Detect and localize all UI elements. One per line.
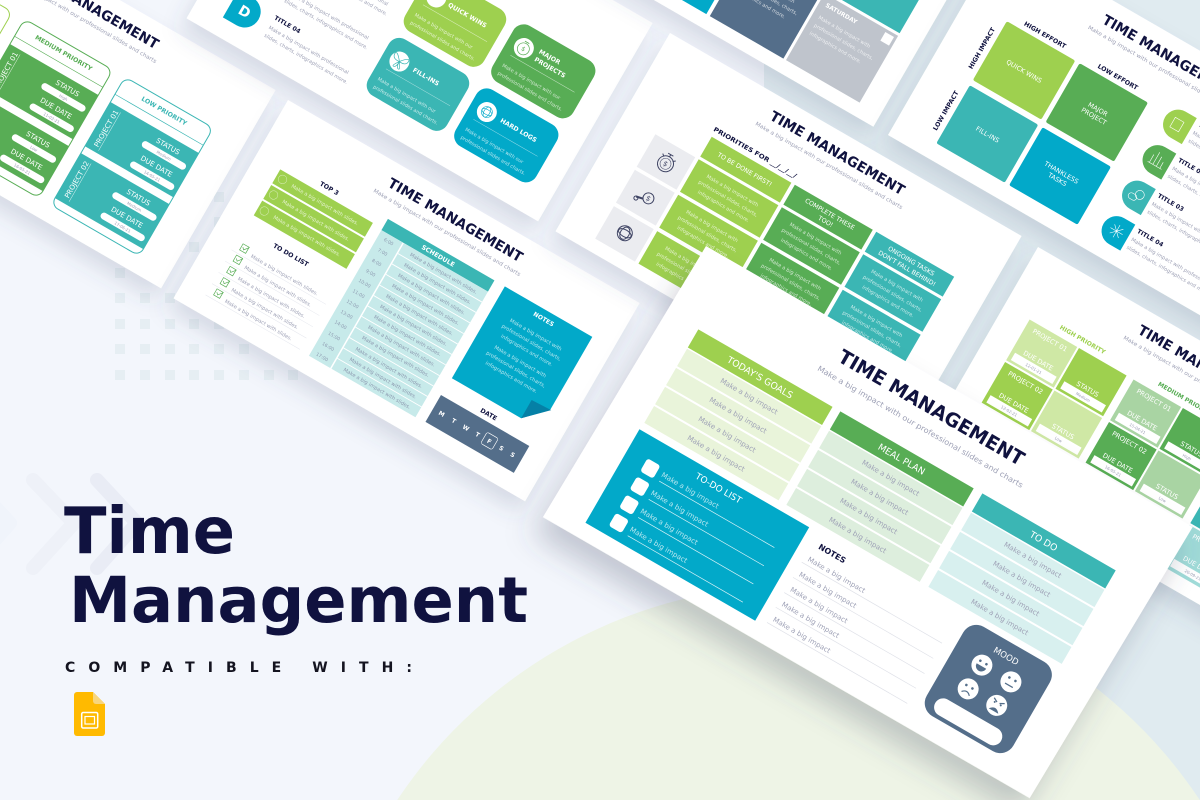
card: major projects: $ <box>520 45 527 53</box>
panel: today's goals: Make a big impact <box>719 376 780 416</box>
card: major projects: PROJECTS <box>533 56 567 80</box>
card: hard logs <box>450 84 563 187</box>
column: to be done first: professional slides, charts, <box>697 180 759 219</box>
panel: today's goals: Make a big impact <box>708 395 769 436</box>
slide: priorities table: PRIORITIES FOR __/__/__/ <box>712 126 798 180</box>
slide: schedule planner <box>174 100 640 501</box>
slide: impact effort matrix: HIGH EFFORT <box>1023 21 1068 51</box>
grid: medium priority: PROJECT 01 <box>1135 387 1173 414</box>
grid: high priority: STATUS <box>1075 380 1100 399</box>
slide: main planner <box>543 246 1193 798</box>
table: schedule: 7:00 <box>376 247 388 258</box>
title: Management <box>69 564 528 637</box>
column: to be done first: Make a big impact with <box>664 246 718 281</box>
panel: to do: Make a big impact <box>1002 540 1063 580</box>
panel: to do list: Make a big impact with slides. <box>243 265 313 309</box>
grid: medium priority: 16-05-21 <box>1104 464 1123 478</box>
grid: medium priority: Low <box>1158 495 1168 504</box>
panel: meal plan <box>786 411 974 582</box>
list: titles with icons: TITLE 03 <box>1156 193 1185 213</box>
grid: high priority: Medium <box>1075 391 1091 403</box>
panel: notes <box>767 539 955 703</box>
column: ongoing tasks: DON'T FALL BEHIND! <box>877 250 937 288</box>
icons column: $ <box>644 194 652 203</box>
panel: date: F <box>485 438 493 446</box>
panel: low priority: 14-05-21 <box>143 169 162 183</box>
card: quick wins: Make a big impact with our <box>413 12 474 51</box>
card: fill-ins: professional slides and charts. <box>372 84 439 127</box>
panel: sticky notes: Make a big impact with <box>493 345 547 379</box>
icon: letter D tab <box>223 0 267 33</box>
table: schedule: 17:00 <box>315 351 329 363</box>
panel: sticky notes: NOTES <box>532 311 555 328</box>
table: schedule: Make a big impact with slides. <box>408 252 478 296</box>
panel: to do: Make a big impact <box>991 559 1052 599</box>
quadrant: major project: PROJECT <box>1080 106 1108 127</box>
table: schedule: Make a big impact with slides. <box>372 314 442 358</box>
panel: meal plan: Make a big impact <box>849 477 910 517</box>
column: to be done first: professional slides, charts, <box>676 215 738 254</box>
column: ongoing tasks: Make a big impact with <box>849 304 903 339</box>
grid: low priority <box>1165 482 1200 595</box>
table: schedule: SCHEDULE <box>420 244 456 269</box>
panel: to-do list: Make a big impact <box>649 488 710 529</box>
panel: to do list: Make a big impact with slides. <box>249 254 319 298</box>
title <box>64 495 528 637</box>
panel: medium priority <box>0 19 113 198</box>
column: complete these too: Make a big impact with <box>768 257 822 292</box>
table: schedule: 12:00 <box>345 299 360 311</box>
slide: priorities table: TIME MANAGEMENT <box>767 109 908 199</box>
panel: to do: Make a big impact <box>969 597 1030 637</box>
grid: medium priority: STATUS <box>1154 482 1180 501</box>
grid: high priority: 12-01-21 <box>1025 362 1043 376</box>
panel: today's goals: TODAY'S GOALS <box>724 354 795 401</box>
title: Make a big impact with our professional slides and charts <box>372 188 521 278</box>
panel: date: S <box>509 451 516 459</box>
table: schedule: Make a big impact with slides. <box>342 367 412 411</box>
panel: notes: Make a big impact <box>780 600 841 640</box>
grid: high priority: PROJECT 02 <box>1007 370 1044 396</box>
panel: top 3 <box>254 160 378 269</box>
text block: title 04: slides, charts, infographics and more. <box>263 33 349 86</box>
slide: priority project lists <box>0 0 276 288</box>
main slide title: TIME MANAGEMENT <box>834 345 1029 471</box>
grid: high priority: PROJECT 01 <box>1031 327 1069 354</box>
column: to be done first: Make a big impact with <box>685 209 739 244</box>
card: hard logs: Make a big impact with our <box>464 127 524 165</box>
panel: saturday: professional slides, charts, <box>813 23 874 62</box>
panel: low priority: PROJECT 02 <box>63 160 91 200</box>
panel: mood <box>919 619 1057 759</box>
table: schedule: 8:00 <box>370 258 382 268</box>
column: ongoing tasks: infographics and more. <box>840 320 895 355</box>
list: titles with icons <box>1096 104 1200 301</box>
panel: to do <box>928 493 1116 664</box>
card: quick wins: professional slides and charts. <box>409 20 476 63</box>
quadrant: thankless tasks: THANKLESS <box>1042 159 1080 186</box>
panel: medium priority: Low <box>29 145 39 153</box>
icon: neutral face <box>997 668 1025 696</box>
panel: to do list <box>206 226 340 349</box>
panel: meal plan: Make a big impact <box>838 496 899 536</box>
column: ongoing tasks: professional slides, charts, <box>841 310 903 349</box>
grid: medium priority: 15-04-21 <box>1128 422 1147 436</box>
grid: medium priority <box>1086 369 1200 519</box>
table: schedule: 15:00 <box>327 331 341 343</box>
panel: low priority: DUE DATE <box>110 205 144 230</box>
panel: notes: NOTES <box>817 542 848 565</box>
column: complete these too: professional slides, charts, <box>780 228 842 267</box>
icons column: $ <box>661 160 669 169</box>
quadrant: thankless tasks <box>1009 127 1111 225</box>
grid: medium priority: PROJECT 02 <box>1110 430 1148 456</box>
panel: to do list: Make a big impact with slides. <box>230 288 300 331</box>
slide: priorities table: Make a big impact with our professional slides and charts <box>754 121 903 211</box>
subtitle: compatible with: COMPATIBLE WITH: <box>65 660 412 676</box>
quadrant: quick wins: QUICK WINS <box>1005 58 1043 85</box>
column: to be done first <box>638 137 791 310</box>
panel: date: T <box>450 417 458 426</box>
panel: low priority <box>51 77 213 256</box>
panel: friday <box>710 0 822 59</box>
panel: low priority: STATUS <box>154 137 182 157</box>
icon: happy face <box>968 651 996 679</box>
panel: notes: Make a big impact <box>806 555 867 595</box>
card: major projects: Make a big impact with our <box>501 63 561 101</box>
text block: title 04 <box>263 15 359 86</box>
panel: low priority: STATUS <box>125 188 152 208</box>
panel: date: DATE <box>479 407 498 422</box>
quadrant: quick wins <box>973 21 1075 120</box>
title: TIME MANAGEMENT <box>385 176 526 266</box>
column: to be done first: infographics and more. <box>655 261 709 296</box>
panel: date: W <box>461 424 471 433</box>
panel: top 3: Make a big impact with slides. <box>272 215 342 259</box>
panel: meal plan: MEAL PLAN <box>876 442 927 478</box>
table: schedule: Make a big impact with slides. <box>354 347 424 390</box>
slide: impact effort matrix: LOW IMPACT <box>932 89 961 132</box>
grid: medium priority: High <box>1182 453 1193 462</box>
card: major projects <box>487 20 600 123</box>
panel: to do list: TO DO LIST <box>272 243 310 269</box>
table: schedule: 14:00 <box>333 319 348 331</box>
card: quick wins: QUICK WINS <box>447 2 488 30</box>
icon: google slides <box>74 692 105 736</box>
table: schedule: 16:00 <box>321 341 335 353</box>
panel: low priority: 17-06-21 <box>113 220 132 234</box>
column: to be done first: infographics and more. <box>676 225 730 260</box>
quadrant: major project <box>1046 63 1148 162</box>
quadrant: thankless tasks: TASKS <box>1046 171 1068 188</box>
panel: to-do list: Make a big impact <box>660 470 721 511</box>
panel: medium priority: 11-02-21 <box>43 111 61 125</box>
grid: high priority <box>982 309 1133 459</box>
quadrant: major project: MAJOR <box>1087 101 1110 119</box>
icon: letter D tab: D <box>235 3 253 22</box>
grid: medium priority: DUE DATE <box>1126 409 1158 433</box>
panel: to-do list: Make a big impact <box>628 525 689 565</box>
panel: low priority: DUE DATE <box>139 154 174 179</box>
icon: sad face <box>954 675 982 703</box>
table: schedule: Make a big impact with slides. <box>378 304 448 348</box>
card: fill-ins: Make a big impact with our <box>376 76 437 115</box>
panel: to do list: Make a big impact with slides. <box>223 299 293 343</box>
panel: today's goals: Make a big impact <box>697 414 758 455</box>
icons column <box>595 134 695 262</box>
table: schedule: Make a big impact with slides. <box>402 263 472 306</box>
panel: medium priority: DUE DATE <box>39 96 73 121</box>
column: to be done first: infographics and more. <box>696 190 750 224</box>
table: schedule: Make a big impact with slides. <box>348 357 418 401</box>
card: quick wins <box>399 0 511 71</box>
panel: notes: Make a big impact <box>771 615 832 655</box>
column: complete these too: infographics and more. <box>759 273 813 308</box>
panel: notes: Make a big impact <box>797 570 858 610</box>
table: schedule <box>309 219 494 417</box>
table: schedule: 11:00 <box>351 288 366 300</box>
grid: high priority: HIGH PRIORITY <box>1058 324 1107 356</box>
panel: medium priority: DUE DATE <box>9 147 44 172</box>
panel: sticky notes: professional slides, charts, <box>500 324 562 363</box>
quadrant: fill-ins: FILL-INS <box>974 125 1001 145</box>
main slide title: Make a big impact with our professional slides and charts <box>816 364 1025 490</box>
table: schedule: Make a big impact with slides. <box>384 294 454 337</box>
panel: sticky notes <box>452 286 593 429</box>
panel: medium priority: STATUS <box>24 130 52 150</box>
column: complete these too: TOO! <box>816 214 834 229</box>
panel: medium priority: MEDIUM PRIORITY <box>34 34 94 73</box>
panel: to do: Make a big impact <box>980 578 1041 618</box>
card: hard logs: HARD LOGS <box>499 117 538 144</box>
table: schedule: Make a big impact with slides. <box>396 273 466 317</box>
panel: today's goals: Make a big impact <box>686 433 747 474</box>
panel: medium priority: 16-05-21 <box>13 162 32 176</box>
panel: sticky notes: Make a big impact with <box>508 318 563 353</box>
panel: meal plan: Make a big impact <box>860 458 921 498</box>
text block: title 04: Make a big impact with professional <box>267 25 350 76</box>
panel: to do: TO DO <box>1027 529 1059 554</box>
panel: low priority: LOW PRIORITY <box>140 96 188 128</box>
table: schedule: Make a big impact with slides. <box>366 325 436 369</box>
slide: impact effort matrix: HIGH IMPACT <box>968 26 997 71</box>
panel: sticky notes: infographics and more. <box>484 360 538 395</box>
panel: sticky notes: professional slides, charts, <box>485 350 547 390</box>
panel: saturday: infographics and more. <box>808 31 862 65</box>
panel: low priority: Medium <box>156 149 172 162</box>
panel: sticky notes: infographics and more. <box>500 334 554 368</box>
column: complete these too: professional slides, charts, <box>760 263 821 302</box>
panel: to do list: Make a big impact with slides. <box>236 276 306 320</box>
card: hard logs: professional slides and charts. <box>459 135 527 177</box>
panel: to-do list: Make a big impact <box>639 507 700 547</box>
column: ongoing tasks <box>824 232 954 368</box>
column: ongoing tasks: ONGOING TASKS <box>886 245 936 278</box>
card: major projects: MAJOR <box>537 49 561 67</box>
grid: high priority: DUE DATE <box>1022 349 1055 373</box>
column: to be done first: professional slides, charts, <box>655 251 717 291</box>
title: Time <box>64 495 235 569</box>
table: schedule: 6:00 <box>382 237 394 247</box>
column: ongoing tasks: infographics and more. <box>861 285 915 319</box>
panel: meal plan: Make a big impact <box>827 515 888 555</box>
slide: priorities table <box>556 33 1022 434</box>
panel: to-do list: TO-DO LIST <box>692 471 743 507</box>
column: ongoing tasks: professional slides, charts, <box>861 275 923 314</box>
table: schedule: 9:00 <box>364 268 376 279</box>
slide: priority status grid <box>924 247 1200 648</box>
grid: high priority: STATUS <box>1050 422 1076 441</box>
grid: medium priority: DUE DATE <box>1101 451 1134 475</box>
card: fill-ins <box>362 34 474 135</box>
column: complete these too: infographics and more. <box>779 238 834 272</box>
panel: date: M <box>437 410 446 419</box>
panel: top 3: Make a big impact with slides. <box>281 199 351 243</box>
text block: title 04: TITLE 04 <box>273 15 302 35</box>
slide: weekly calendar <box>522 0 988 127</box>
table: schedule: Make a big impact with slides. <box>390 283 460 327</box>
panel: notes: Make a big impact <box>789 585 850 625</box>
slide: quadrant cards <box>186 0 653 221</box>
panel: medium priority: STATUS <box>54 79 81 99</box>
slide: impact effort matrix: LOW EFFORT <box>1096 63 1139 92</box>
card: fill-ins: FILL-INS <box>411 67 441 88</box>
panel: low priority: Medium <box>126 201 143 213</box>
panel: saturday: SATURDAY <box>824 2 859 26</box>
list: titles with icons: TITLE 04 <box>1136 228 1164 249</box>
main slide content <box>585 277 1146 764</box>
panel: medium priority: High <box>58 93 69 102</box>
card: major projects: professional slides and charts. <box>496 71 564 113</box>
column: to be done first: TO BE DONE FIRST! <box>715 151 773 189</box>
column: complete these too: Make a big impact with <box>788 222 842 257</box>
icon: angry face <box>982 691 1011 720</box>
panel: date: T <box>474 431 482 440</box>
slide: impact effort matrix <box>888 0 1200 338</box>
table: schedule: 13:00 <box>339 309 354 321</box>
panel: date: S <box>498 445 505 453</box>
column: ongoing tasks: Make a big impact with <box>870 269 924 304</box>
panel: top 3: Make a big impact with slides. <box>290 184 360 227</box>
panel: to-do list <box>585 429 809 621</box>
grid: high priority: DUE DATE <box>997 391 1030 415</box>
panel: saturday <box>786 0 898 103</box>
grid: high priority: Low <box>1054 435 1064 444</box>
panel: low priority: PROJECT 01 <box>93 109 120 149</box>
panel: date <box>425 386 534 473</box>
panel: top 3: TOP 3 <box>318 181 340 197</box>
column: to be done first: Make a big impact with <box>705 174 759 209</box>
panel: mood: MOOD <box>991 646 1020 668</box>
quadrant: fill-ins <box>936 85 1038 183</box>
table: schedule: Make a big impact with slides. <box>360 335 430 379</box>
column: complete these too <box>742 185 873 321</box>
panel: today's goals <box>644 329 833 500</box>
table: schedule: 10:00 <box>357 278 372 290</box>
column: complete these too: COMPLETE THESE <box>803 198 856 232</box>
grid: high priority: 12-02-21 <box>1000 404 1019 418</box>
panel: saturday: Make a big impact with <box>817 15 871 50</box>
